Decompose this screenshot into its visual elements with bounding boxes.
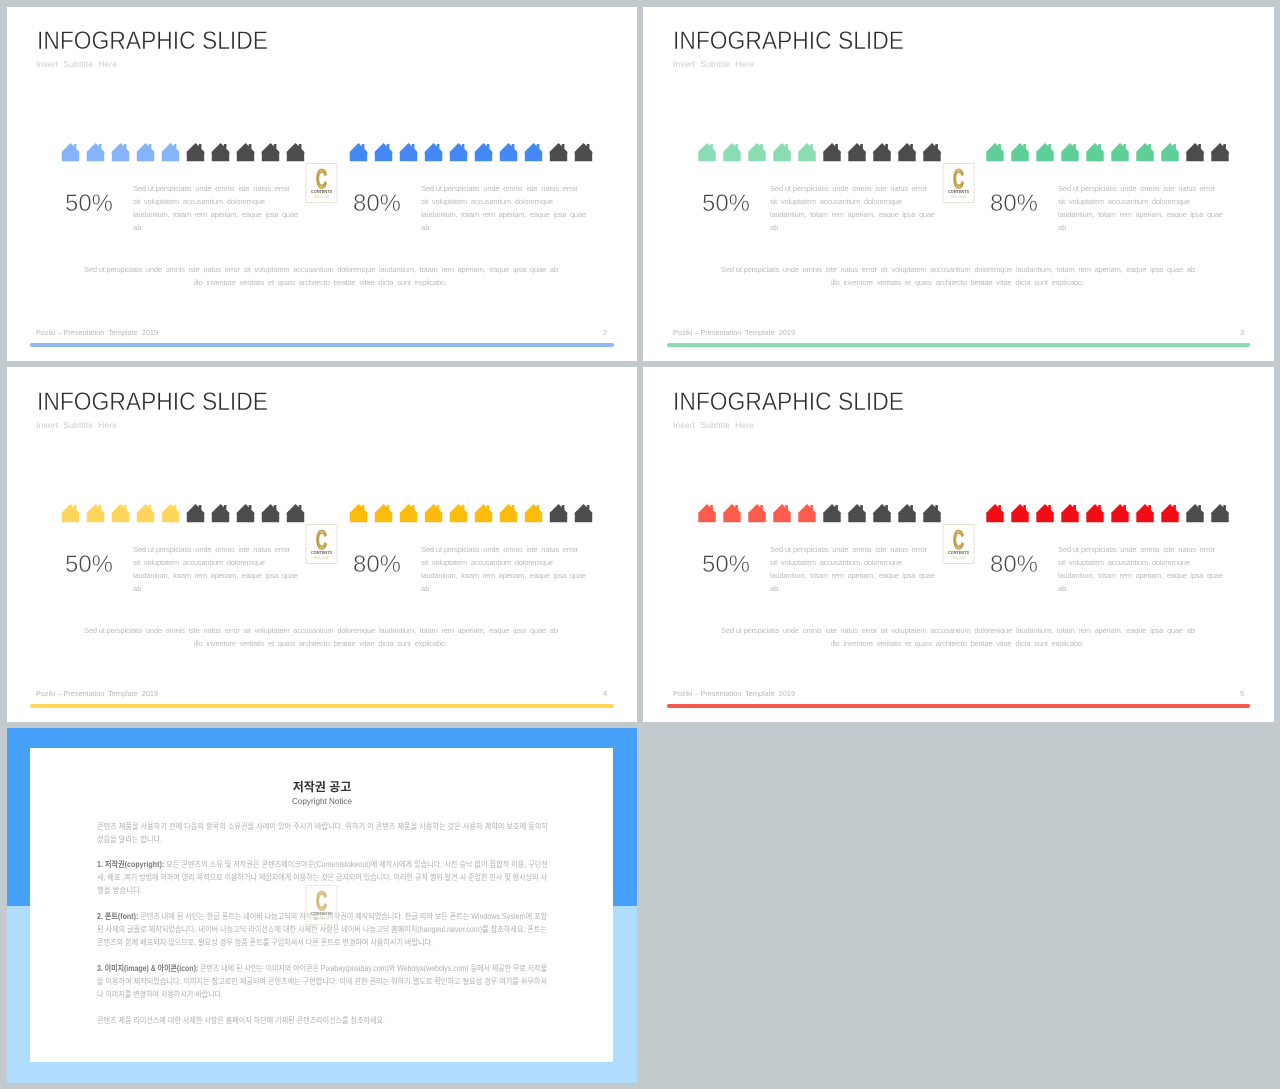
- panel: yellow slide: [7, 367, 637, 722]
- logo: REAL LOVE: [951, 556, 966, 560]
- text block: left description: Sed ut perspiciatis unde omnis iste natus error: [133, 184, 290, 193]
- text block: right description: sit voluptatem accusantium doloremque: [421, 197, 553, 206]
- text block: center description: illo inventore veritatis et quasi architecto beatae vitae dicta sunt explicabo.: [831, 278, 1084, 287]
- text block: left description: [770, 184, 935, 232]
- icon row: 50% houses: [61, 143, 305, 161]
- text block: left description: laudantium, totam rem aperiam, eaque ipsa quae: [770, 210, 935, 219]
- logo: REAL LOVE: [314, 556, 329, 560]
- logo: [306, 164, 337, 202]
- text block: section 1: 1. 저작권(copyright): 모든 콘텐츠의 소유 및 저작권은 콘텐츠메이크아웃(Contentstokeout)에 제작사에게 있습니다. 사전 승낙 없이 집합적 이용, 구단전: [97, 859, 548, 869]
- stat: 80%: 80%: [990, 190, 1038, 217]
- text block: left description: sit voluptatem accusantium doloremque: [770, 197, 902, 206]
- text block: left description: sit voluptatem accusantium doloremque: [133, 558, 265, 567]
- text block: left description: [133, 184, 298, 232]
- stat: 50%: 50%: [65, 551, 113, 578]
- text block: left description: laudantium, totam rem aperiam, eaque ipsa quae: [133, 571, 298, 580]
- text block: right description: sit voluptatem accusantium doloremque: [421, 558, 553, 567]
- logo: CONTENTS: [311, 189, 332, 194]
- text block: right description: sit voluptatem accusantium doloremque: [1058, 558, 1190, 567]
- footer: Poziki – Presentation Template 2019: [673, 328, 795, 337]
- icon row: 50% houses: [698, 504, 942, 522]
- accent bar: [30, 704, 614, 708]
- icon row: 80% houses: [349, 504, 593, 522]
- text block: right description: Sed ut perspiciatis unde omnis iste natus error: [1058, 545, 1216, 554]
- logo: C: [316, 886, 327, 916]
- text block: right description: Sed ut perspiciatis unde omnis iste natus error: [421, 545, 578, 554]
- icon row: 50% houses: [61, 504, 305, 522]
- text block: right description: [421, 545, 586, 593]
- text block: left description: Sed ut perspiciatis unde omnis iste natus error: [770, 184, 928, 193]
- text block: center description: illo inventore veritatis et quasi architecto beatae vitae dicta sunt explicabo.: [194, 278, 447, 287]
- text block: center description: Sed ut perspiciatis unde omnis iste natus error sit voluptatem accusantium doloremque laudantium, totam rem aperiam, eaque ipsa quae ab: [721, 265, 1195, 274]
- text block: center description: [721, 626, 1195, 648]
- text block: right description: sit voluptatem accusantium doloremque: [1058, 197, 1190, 206]
- text block: center description: Sed ut perspiciatis unde omnis iste natus error sit voluptatem accusantium doloremque laudantium, totam rem aperiam, eaque ipsa quae ab: [84, 265, 558, 274]
- panel: copyright notice: [7, 728, 637, 1083]
- logo: [943, 164, 974, 202]
- text block: left description: laudantium, totam rem aperiam, eaque ipsa quae: [770, 571, 935, 580]
- logo: REAL LOVE: [951, 194, 966, 198]
- text block: left description: [770, 545, 935, 593]
- subtitle: Insert Subtitle Here: [673, 420, 754, 430]
- text block: right description: ab: [1058, 223, 1066, 232]
- subtitle: Insert Subtitle Here: [36, 420, 117, 430]
- text block: left description: ab: [133, 223, 141, 232]
- text block: center description: illo inventore veritatis et quasi architecto beatae vitae dicta sunt explicabo.: [831, 639, 1084, 648]
- text block: intro: [97, 821, 549, 844]
- text block: right description: [1058, 184, 1223, 232]
- stat: 80%: 80%: [353, 551, 401, 578]
- logo: C: [316, 164, 327, 194]
- accent bar: [667, 343, 1250, 347]
- footer: Poziki – Presentation Template 2019: [36, 689, 158, 698]
- text block: right description: ab: [421, 584, 429, 593]
- text block: right description: laudantium, totam rem aperiam, eaque ipsa quae: [421, 571, 586, 580]
- text block: intro: 셨음을 알리는 합니다.: [97, 834, 162, 844]
- logo: [306, 524, 337, 564]
- subtitle: Insert Subtitle Here: [673, 59, 754, 69]
- text block: left description: Sed ut perspiciatis unde omnis iste natus error: [133, 545, 290, 554]
- logo: [306, 886, 337, 924]
- text block: section 2: 2. 폰트(font): 콘텐츠 내에 된 사인는 한글 폰트는 네이버 나눔고딕의 저작물로 저작권이 제작되었습니다. 한글 외의 보든 폰트는 Windows System에 포함: [97, 911, 548, 921]
- text block: closing: 콘텐츠 제품 라이선스에 대한 사제한 사항은 홈페이지 하단에 기재된 콘텐츠라이선스를 참조하세요.: [97, 1015, 385, 1025]
- stat: 50%: 50%: [65, 190, 113, 217]
- logo: CONTENTS: [311, 911, 332, 916]
- text block: center description: [84, 626, 558, 648]
- text block: right description: Sed ut perspiciatis unde omnis iste natus error: [1058, 184, 1216, 193]
- text block: section 1: 행을 받습니다.: [97, 885, 142, 895]
- text block: right description: ab: [1058, 584, 1066, 593]
- title: INFOGRAPHIC SLIDE: [37, 27, 268, 55]
- logo: C: [953, 164, 964, 194]
- icon row: 80% houses: [986, 143, 1230, 161]
- text block: right description: Sed ut perspiciatis unde omnis iste natus error: [421, 184, 578, 193]
- stat: 50%: 50%: [702, 190, 750, 217]
- panel: green slide: [643, 7, 1274, 361]
- text block: right description: laudantium, totam rem aperiam, eaque ipsa quae: [1058, 571, 1223, 580]
- text block: center description: Sed ut perspiciatis unde omnis iste natus error sit voluptatem accusantium doloremque laudantium, totam rem aperiam, eaque ipsa quae ab: [721, 626, 1195, 635]
- panel: red slide: [643, 367, 1274, 722]
- text block: section 1: 세, 배포 ,복기 방법에 의하여 영리 목적으로 이용하거나 제삼자에게 이용하는 것은 금지되어 있습니다. 이러한 규칙 행위 발견 시 준엄한 민사 및 형사상의 사: [97, 872, 548, 882]
- text block: left description: ab: [770, 223, 778, 232]
- title: INFOGRAPHIC SLIDE: [673, 27, 904, 55]
- text block: center description: [721, 265, 1195, 287]
- title: INFOGRAPHIC SLIDE: [673, 388, 904, 416]
- heading: copyright: 저작권 공고: [293, 779, 351, 794]
- icon row: 50% houses: [698, 143, 942, 161]
- text block: center description: [84, 265, 558, 287]
- text block: left description: ab: [770, 584, 778, 593]
- text block: left description: Sed ut perspiciatis unde omnis iste natus error: [770, 545, 928, 554]
- logo: REAL LOVE: [314, 916, 329, 920]
- text block: left description: sit voluptatem accusantium doloremque: [770, 558, 902, 567]
- text block: right description: laudantium, totam rem aperiam, eaque ipsa quae: [421, 210, 586, 219]
- subtitle: Insert Subtitle Here: [36, 59, 117, 69]
- icon row: 80% houses: [349, 143, 593, 161]
- accent bar: [30, 343, 614, 347]
- stat: 80%: 80%: [353, 190, 401, 217]
- icon row: 80% houses: [986, 504, 1230, 522]
- text block: right description: [1058, 545, 1223, 593]
- footer: Poziki – Presentation Template 2019: [36, 328, 158, 337]
- accent bar: [667, 704, 1250, 708]
- page number: 5: [1240, 689, 1244, 698]
- text block: center description: illo inventore veritatis et quasi architecto beatae vitae dicta sunt explicabo.: [194, 639, 447, 648]
- page number: 4: [603, 689, 607, 698]
- text block: section 2: 된 사제의 글꼴로 제작되었습니다. 네이버 나눔고딕 라이선스에 대한 사제한 사항은 네이버 나눔고딕 홈페이지(hangeul.naver.com)를 참조하세요. 폰트는: [97, 924, 547, 934]
- text block: right description: ab: [421, 223, 429, 232]
- text block: right description: [421, 184, 586, 232]
- logo: C: [953, 525, 964, 555]
- text block: center description: Sed ut perspiciatis unde omnis iste natus error sit voluptatem accusantium doloremque laudantium, totam rem aperiam, eaque ipsa quae ab: [84, 626, 558, 635]
- text block: left description: laudantium, totam rem aperiam, eaque ipsa quae: [133, 210, 298, 219]
- footer: Poziki – Presentation Template 2019: [673, 689, 795, 698]
- stat: 50%: 50%: [702, 551, 750, 578]
- logo: [943, 524, 974, 564]
- panel: blue slide: [7, 7, 637, 361]
- page number: 3: [1240, 328, 1244, 337]
- logo: CONTENTS: [948, 550, 969, 555]
- text block: section 3: [97, 963, 547, 999]
- text block: left description: [133, 545, 298, 593]
- text block: section 3: 을 이용하여 제작되었습니다. 이미지는 참고로만 제공되며 콘텐츠에는 구현합니다. 이에 관한 권리는 위하기 별도로 확인하고 필요성 경우 여기를 쉬우하셔: [97, 976, 547, 986]
- logo: CONTENTS: [948, 189, 969, 194]
- logo: REAL LOVE: [314, 194, 329, 198]
- text block: left description: sit voluptatem accusantium doloremque: [133, 197, 265, 206]
- text block: section 3: 3. 이미지(image) & 아이콘(icon): 콘텐츠 내에 된 사인는 이미지와 아이콘은 Pixabay(pixabay.com)와 Webolys(webolys.com) 등에서 제공한 무료 저작물: [97, 963, 547, 973]
- text block: section 1: [97, 859, 548, 895]
- logo: CONTENTS: [311, 550, 332, 555]
- text block: right description: laudantium, totam rem aperiam, eaque ipsa quae: [1058, 210, 1223, 219]
- text block: section 2: [97, 911, 548, 947]
- page number: 2: [603, 328, 607, 337]
- stat: 80%: 80%: [990, 551, 1038, 578]
- title: INFOGRAPHIC SLIDE: [37, 388, 268, 416]
- subheading: copyright notice: Copyright Notice: [292, 796, 352, 806]
- logo: C: [316, 525, 327, 555]
- text block: intro: 콘텐츠 제품을 사용하기 전에 다음의 항목의 소유권을 사례이 있어 주시기 바랍니다. 위하기 이 콘텐츠 제품을 사용하는 것은 사용자 계약의 보호에 동의하: [97, 821, 549, 831]
- text block: left description: ab: [133, 584, 141, 593]
- text block: section 2: 콘텐츠의 함께 배포되지 않으므로, 필요성 경우 정품 폰트를 구입하셔서 다른 폰트로 변경하여 사용하시기 바랍니다.: [97, 937, 433, 947]
- text block: section 3: 나 이미지를 변경하여 사용하시기 바랍니다.: [97, 989, 223, 999]
